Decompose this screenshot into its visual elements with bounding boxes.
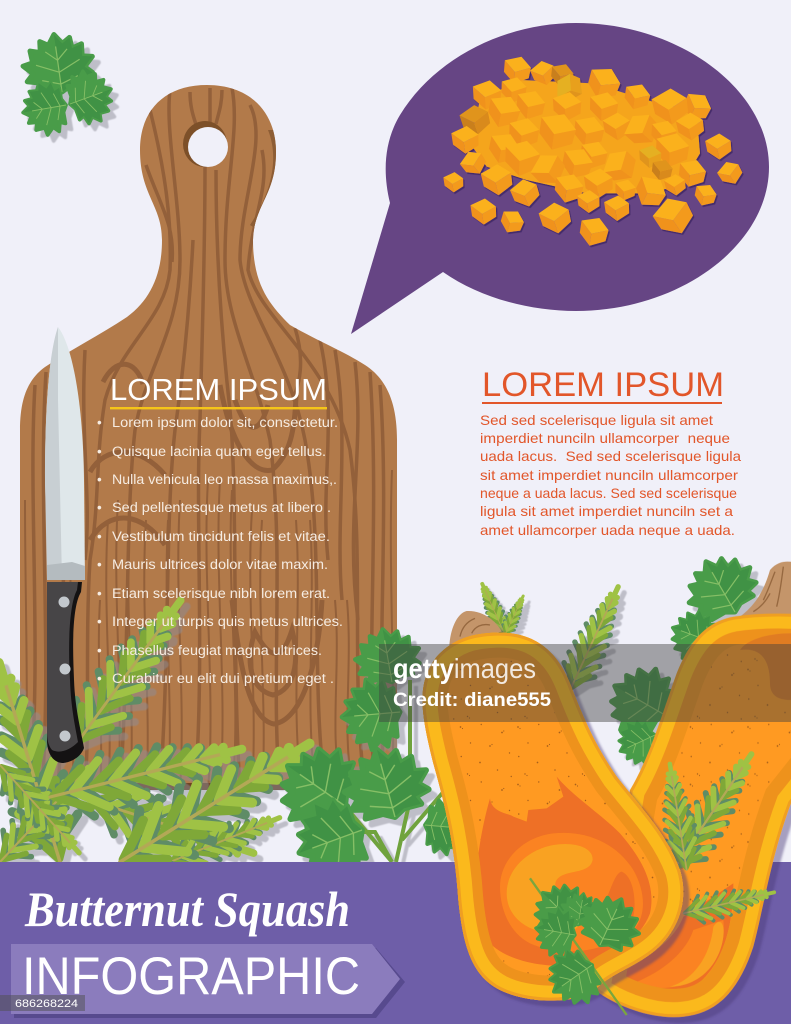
bullet list: Curabitur eu elit dui pretium eget . [112, 671, 334, 686]
rosemary sprig [0, 753, 92, 865]
bullet list: Lorem ipsum dolor sit, consectetur. [112, 415, 338, 430]
parsley leaf [423, 798, 472, 856]
heading: lorem ipsum right: LOREM IPSUM [482, 366, 724, 404]
parsley leaf: lower between squashes [611, 714, 665, 772]
rosemary sprig [56, 585, 202, 758]
rosemary sprig: behind left squash right [499, 593, 529, 638]
watermark band [379, 644, 791, 722]
wood grain [20, 88, 397, 790]
arrow label shape [11, 944, 405, 1018]
parsley leaf [351, 624, 424, 688]
board handle hole [183, 121, 228, 167]
image id tag: 686268224 [15, 998, 78, 1010]
watermark text: gettyimages [393, 653, 536, 684]
back squash half [597, 561, 791, 1024]
bullet list: Integer ut turpis quis metus ultrices. [112, 614, 343, 629]
speech bubble with cubed squash [351, 23, 769, 334]
icon: parsley sprig top left [19, 30, 120, 138]
paragraph: neque a uada lacus. Sed sed scelerisque [480, 485, 737, 501]
purple banner [0, 862, 791, 1024]
rosemary sprig [82, 776, 261, 877]
rosemary sprig: small behind left squash [475, 581, 513, 638]
rosemary on back squash [654, 743, 777, 927]
parsley leaf [336, 739, 436, 828]
parsley leaf [264, 732, 369, 840]
bullet list: • [97, 500, 102, 515]
bullet list: Vestibulum tincidunt felis et vitae. [112, 529, 330, 544]
rosemary and parsley behind squash [475, 544, 765, 772]
rosemary sprig [102, 715, 327, 890]
back squash flesh [597, 614, 791, 1024]
bullet list: Etiam scelerisque nibh lorem erat. [112, 586, 330, 601]
paragraph: ligula sit amet imperdiet nunciln set a [480, 503, 733, 519]
bullet list: • [97, 557, 102, 572]
front squash half [413, 611, 697, 1010]
speech bubble shape [351, 23, 769, 334]
cubed butternut squash pile [443, 55, 746, 249]
heading: lorem ipsum board: LOREM IPSUM [110, 372, 327, 407]
infographic label: INFOGRAPHIC [22, 947, 360, 1006]
parsley leaf [339, 677, 403, 752]
front squash flesh [413, 627, 697, 1010]
watermark credit: Credit: diane555 [393, 690, 551, 711]
back squash stump [740, 562, 791, 617]
butternut squash halves [413, 562, 791, 1024]
parsley stems [340, 680, 445, 862]
parsley leaf: top right [676, 544, 765, 630]
rosemary bunch lower left [0, 585, 327, 890]
bullet list: • [97, 614, 102, 629]
stock photo watermark [379, 644, 791, 722]
image id tag [0, 995, 85, 1011]
bullet list: • [97, 444, 102, 459]
knife handle [47, 582, 84, 763]
bullet list: Mauris ultrices dolor vitae maxim. [112, 557, 328, 572]
bullet list: Sed pellentesque metus at libero . [112, 500, 331, 515]
bullet list: • [97, 586, 102, 601]
paragraph: uada lacus. Sed sed scelerisque ligula [480, 448, 741, 464]
knife [45, 327, 85, 763]
front squash stump [449, 611, 502, 647]
paragraph: amet ullamcorper uada neque a uada. [480, 522, 735, 538]
bullet list: Phasellus feugiat magna ultrices. [112, 643, 322, 658]
bullet list: • [97, 529, 102, 544]
board text block [97, 372, 343, 686]
bullet list: • [97, 415, 102, 430]
banner background [0, 862, 791, 1024]
paragraph: sit amet imperdiet nunciln ullamcorper [480, 467, 738, 483]
bullet list: • [97, 643, 102, 658]
rosemary sprig [0, 653, 90, 871]
rosemary sprig: between squashes [555, 580, 634, 697]
board shape [20, 85, 397, 790]
parsley leaf [286, 792, 376, 891]
paragraph [480, 412, 741, 538]
knife blade [45, 327, 85, 580]
parsley leaf: by stem [664, 604, 721, 666]
right text block [480, 366, 741, 538]
bullet list: • [97, 472, 102, 487]
bullet list: • [97, 671, 102, 686]
bullet list: Quisque lacinia quam eget tellus. [112, 444, 326, 459]
banner title script: Butternut Squash [24, 881, 350, 937]
paragraph: Sed sed scelerisque ligula sit amet [480, 412, 713, 428]
rosemary sprig [163, 801, 286, 878]
rosemary sprig [43, 721, 249, 826]
panel: wooden cutting board [20, 85, 397, 790]
rosemary sprig [0, 755, 102, 875]
paragraph: imperdiet nunciln ullamcorper neque [480, 430, 730, 446]
parsley bunch center [264, 624, 472, 891]
bullet list [97, 415, 343, 686]
parsley on squash [523, 873, 649, 1015]
bullet list: Nulla vehicula leo massa maximus,. [112, 472, 337, 487]
parsley leaf: between squashes [597, 656, 682, 745]
